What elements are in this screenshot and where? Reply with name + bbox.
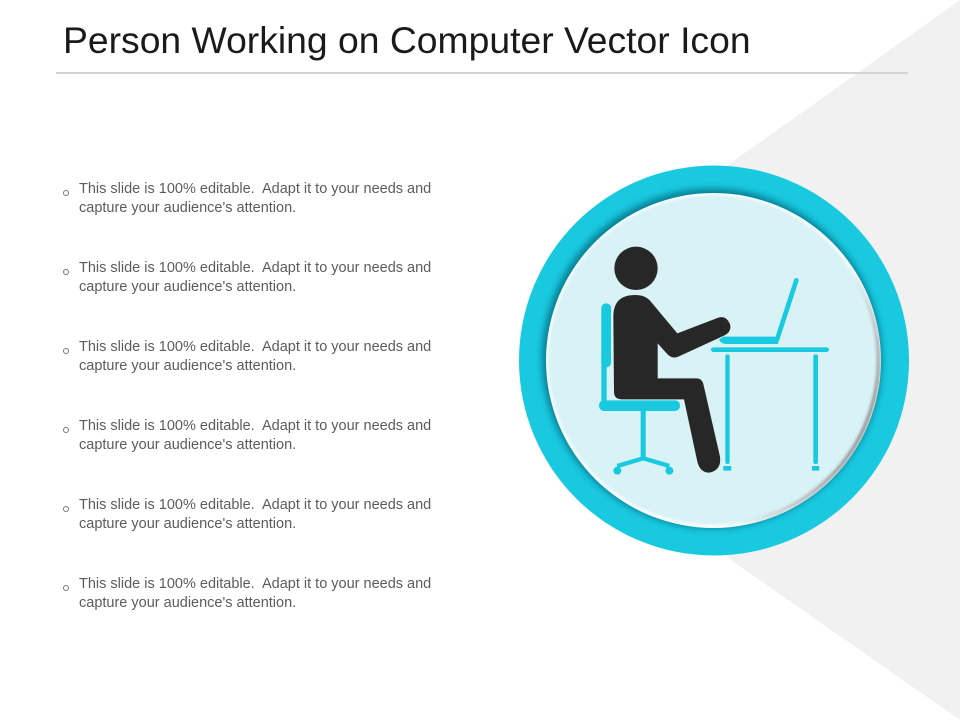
outer ring [519,166,909,556]
bullet item 1: This slide is 100% editable. Adapt it to your needs and capture your audience's attention. [79,181,431,216]
laptop [719,280,796,344]
chair [599,303,680,475]
title: Person Working on Computer Vector Icon [63,19,751,61]
desk [711,347,829,471]
bullet item 2: This slide is 100% editable. Adapt it to your needs and capture your audience's attention. [79,260,431,295]
ring inner shadow [542,188,882,528]
bullet item 6: This slide is 100% editable. Adapt it to your needs and capture your audience's attention. [79,576,431,611]
text list [63,181,431,611]
person at desk icon [599,247,829,475]
bullet item 3: This slide is 100% editable. Adapt it to your needs and capture your audience's attention. [79,339,431,374]
bullet item 4: This slide is 100% editable. Adapt it to your needs and capture your audience's attention. [79,418,431,453]
inner disc [546,193,881,528]
circle emblem [519,166,909,556]
bullet item 5: This slide is 100% editable. Adapt it to your needs and capture your audience's attention. [79,497,431,532]
person [613,247,730,473]
